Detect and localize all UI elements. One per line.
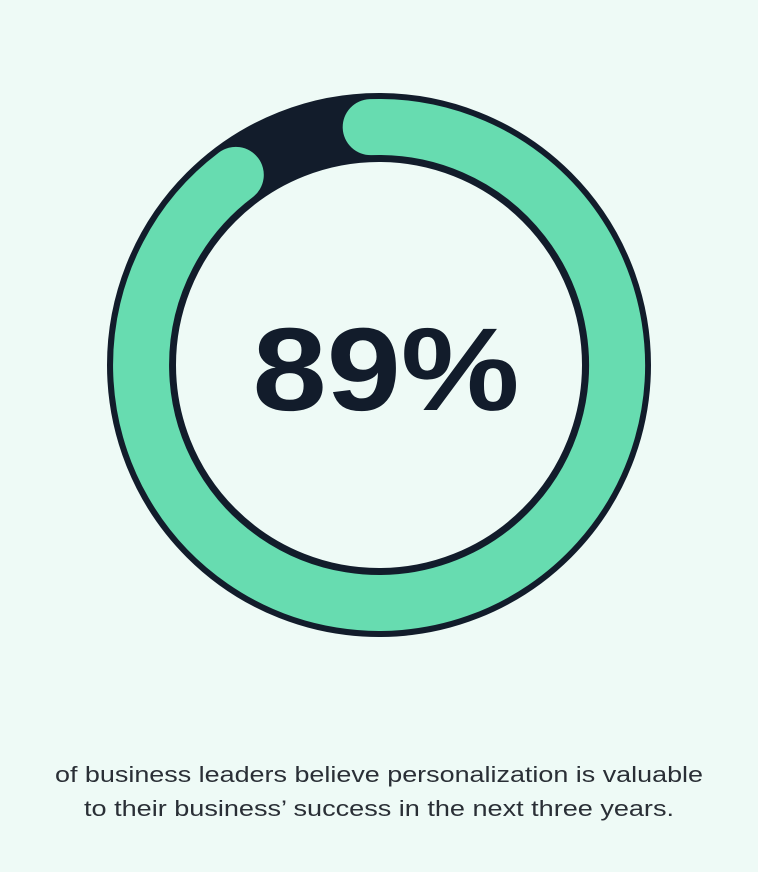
donut chart: 89% [141, 127, 617, 603]
caption [55, 762, 703, 821]
big percentage: 89% [252, 304, 520, 436]
caption: of business leaders believe personalization is valuable [55, 762, 703, 787]
caption: to their business’ success in the next three years. [84, 796, 674, 821]
